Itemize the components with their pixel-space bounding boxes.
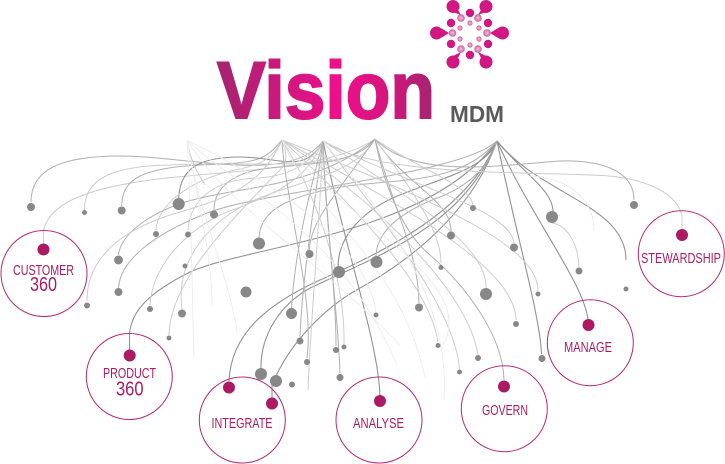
- panel: manage: MANAGE: [564, 340, 612, 356]
- panel: customer 360: [1, 230, 87, 316]
- grey data nodes: [27, 198, 638, 388]
- panel: govern: GOVERN: [482, 403, 528, 419]
- panel: analyse: [336, 377, 422, 463]
- panel: manage: [547, 300, 633, 386]
- logo suffix: MDM: MDM: [450, 101, 504, 127]
- panel: integrate: [199, 377, 285, 463]
- panel: product 360: 360: [116, 378, 144, 400]
- logo mark: radial droplet burst: [430, 0, 509, 68]
- panel: product 360: [86, 334, 172, 420]
- panel: stewardship: [638, 211, 724, 297]
- panel: customer 360: 360: [30, 274, 57, 296]
- panel: govern: [461, 366, 547, 452]
- panel: customer 360: CUSTOMER: [13, 263, 74, 279]
- network curves from four hubs to nodes: [31, 139, 682, 400]
- panel: product 360: PRODUCT: [103, 366, 156, 382]
- logo wordmark: Vision: Vision: [217, 46, 435, 136]
- panel: integrate: INTEGRATE: [212, 416, 273, 432]
- panel: analyse: ANALYSE: [353, 416, 404, 432]
